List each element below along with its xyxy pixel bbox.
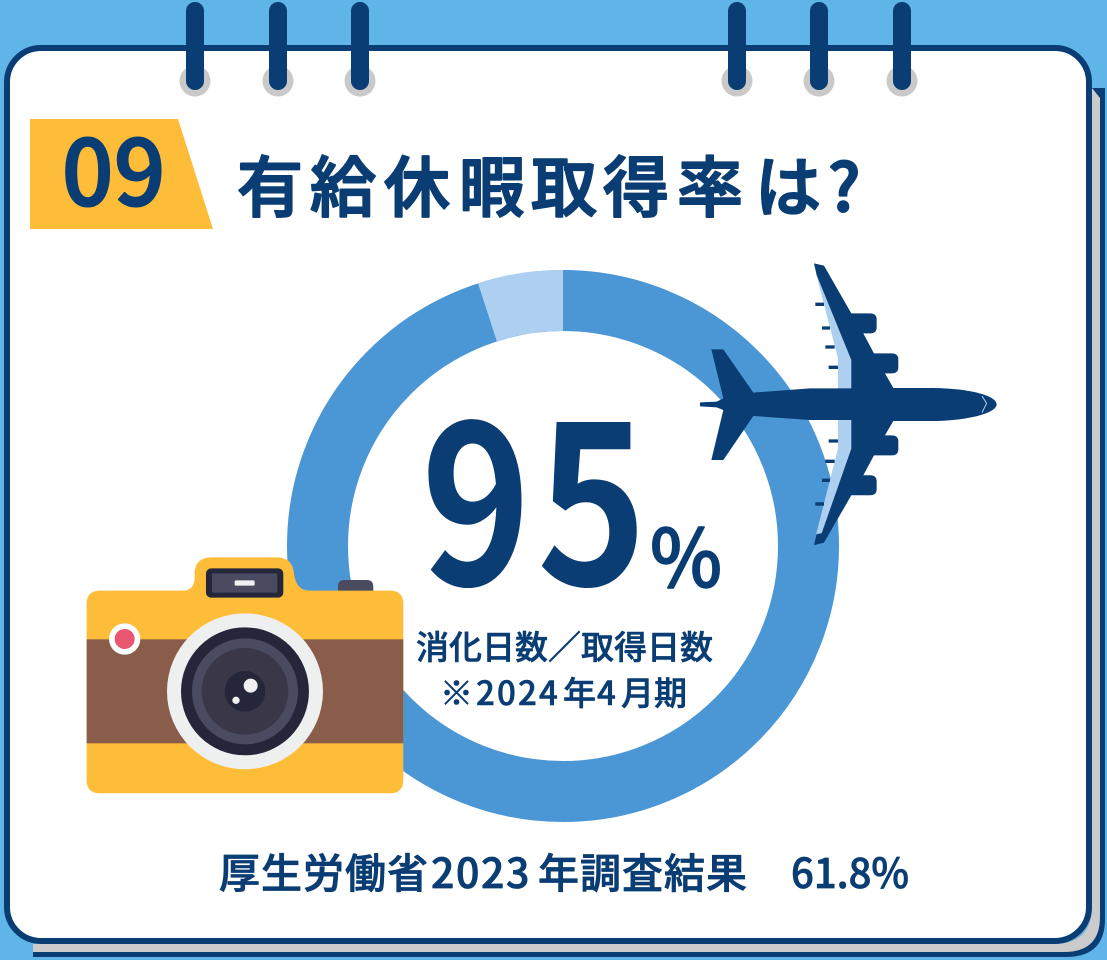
number badge xyxy=(30,101,213,231)
binder rings right xyxy=(722,2,918,96)
binder rings left xyxy=(180,2,376,96)
camera icon xyxy=(87,557,403,793)
main percentage value: % xyxy=(650,495,722,611)
note text: ※2024年4月期 xyxy=(440,667,687,715)
main percentage value xyxy=(421,331,722,649)
donut chart xyxy=(318,270,808,792)
main percentage value: 9 xyxy=(421,331,531,649)
plane icon xyxy=(700,263,997,545)
footer comparison text: 厚生労働省2023年調査結果 xyxy=(219,840,747,900)
note text: 消化日数／取得日数 xyxy=(416,621,713,669)
number badge: 09 xyxy=(62,101,165,231)
footer comparison text: 61.8% xyxy=(791,840,909,900)
title: 有給休暇取得率は? xyxy=(237,135,860,231)
note text xyxy=(416,621,713,715)
main percentage value: 5 xyxy=(537,331,647,649)
